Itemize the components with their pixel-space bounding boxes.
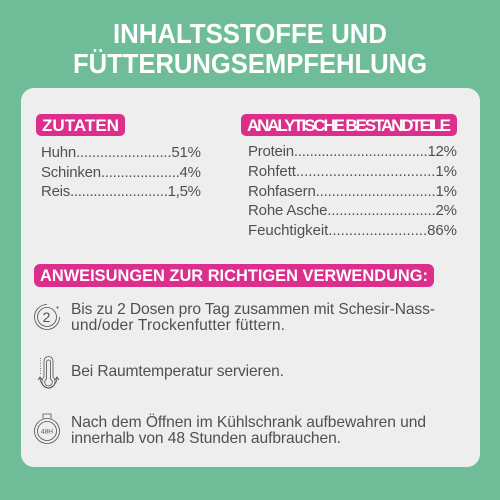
panel: analytical components: [241, 114, 457, 239]
icon: two doses: [34, 304, 60, 329]
analytical list: Rohe Asche...........................2%: [248, 202, 457, 219]
icon: 48 hour stopwatch: [34, 414, 60, 444]
text: storage instruction: Nach dem Öffnen im Kühlschrank aufbewahren und: [71, 413, 426, 431]
panel: instructions: [34, 264, 435, 447]
analytical list: Feuchtigkeit........................86%: [248, 222, 457, 239]
ingredient list: Schinken....................4%: [41, 164, 201, 181]
ingredient list: Reis.........................1,5%: [41, 183, 201, 200]
icon: 48 hour stopwatch: 48H: [41, 428, 53, 436]
analytical list: Rohfasern..............................1%: [248, 183, 457, 200]
title: [73, 18, 427, 79]
analytical list: Rohfett..................................1%: [248, 163, 457, 180]
text: storage instruction: innerhalb von 48 Stunden aufbrauchen.: [71, 430, 341, 447]
ingredient list: [41, 144, 201, 200]
heading: Anweisungen: ANWEISUNGEN ZUR RICHTIGEN VERWENDUNG:: [40, 266, 428, 285]
icon: two doses: 2: [43, 309, 51, 325]
heading: Zutaten: ZUTATEN: [42, 116, 119, 135]
ingredient list: Huhn........................51%: [41, 144, 201, 161]
panel: ingredients: [36, 114, 201, 200]
text: storage instruction: [71, 413, 426, 447]
text: dosage instruction: [71, 301, 435, 334]
heading: Analytische Bestandteile: ANALYTISCHE BESTANDTEILE: [247, 116, 451, 135]
panel: content card: [21, 88, 480, 467]
analytical list: Protein..................................12%: [248, 143, 457, 160]
analytical list: [248, 143, 457, 239]
title: INHALTSSTOFFE UND: [113, 18, 387, 49]
text: dosage instruction: Bis zu 2 Dosen pro Tag zusammen mit Schesir-Nass-: [71, 301, 435, 318]
text: serving temperature: Bei Raumtemperatur servieren.: [71, 363, 284, 380]
text: dosage instruction: und/oder Trockenfutter füttern.: [71, 317, 285, 334]
title: FÜTTERUNGSEMPFEHLUNG: [73, 48, 427, 79]
icon: thermometer: [38, 356, 59, 388]
